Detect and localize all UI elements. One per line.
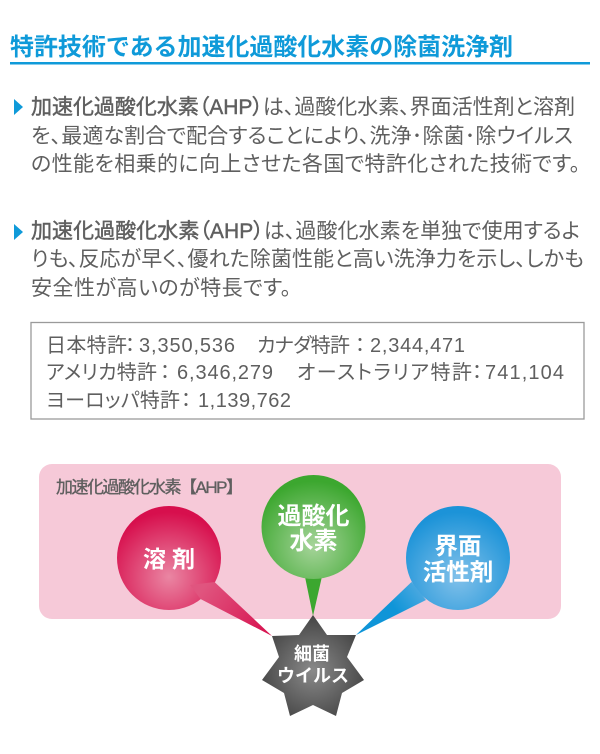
icon: bullet arrow 1 [14,99,23,115]
panel: patents: ヨーロッパ特許 [46,389,180,412]
panel: patents: ： [120,335,140,357]
heading: AHP: 加速化過酸化水素【AHP】 [56,478,243,497]
star: bacteria and viruses: 細菌 [294,644,330,664]
text block: paragraph 2: 加速化過酸化水素（AHP）は、過酸化水素を単独で使用するよ [31,220,580,243]
bubble: solvent [117,506,272,636]
panel: patents: 2,344,471 [370,335,465,357]
text block: paragraph 1: を、最適な割合で配合することにより、洗浄･除菌･除ウイルス [31,125,573,148]
panel: patents: 1,139,762 [198,390,291,412]
bubble: surfactant [356,506,510,635]
text block: paragraph 2: 安全性が高いのが特長です。 [31,277,291,300]
bubble: surfactant: 界面 [434,533,482,559]
text block: paragraph 1: 加速化過酸化水素（AHP）は、過酸化水素、界面活性剤と溶剤 [31,96,575,119]
bubble: solvent: 溶剤 [143,546,201,572]
bubble: hydrogen peroxide: 過酸化 [278,503,350,530]
bubble: hydrogen peroxide [262,475,366,616]
panel: patents: アメリカ特許 [46,361,157,384]
title: 特許技術である加速化過酸化水素の除菌洗浄剤 [10,34,513,61]
text block: paragraph 2 [14,220,584,300]
star: bacteria and viruses [262,615,364,716]
panel: patents: 741,104 [485,362,564,384]
bubble: hydrogen peroxide: 水素 [290,528,338,555]
panel: patents: ： [467,362,487,384]
icon: bullet arrow 2 [14,224,23,240]
star: bacteria and viruses: ウイルス [277,666,349,686]
panel: patents: ： [350,335,370,357]
text block: paragraph 2: りも、反応が早く、優れた除菌性能と高い洗浄力を示し、しかも [31,248,584,271]
panel: patents: オーストラリア特許 [297,361,472,384]
bubble: surfactant: 活性剤 [423,559,493,585]
panel: patents: 6,346,279 [177,362,273,384]
panel: patents [31,322,584,419]
panel: patents: 3,350,536 [139,335,235,357]
text block: paragraph 1: の性能を相乗的に向上させた各国で特許化された技術です。 [31,153,580,176]
panel: patents: 日本特許 [46,334,127,357]
panel: patents: カナダ特許 [257,334,350,357]
text block: paragraph 1 [14,96,580,176]
panel: patents: ： [155,362,175,384]
panel: patents: ： [176,390,196,412]
panel: AHP diagram background [39,464,561,619]
